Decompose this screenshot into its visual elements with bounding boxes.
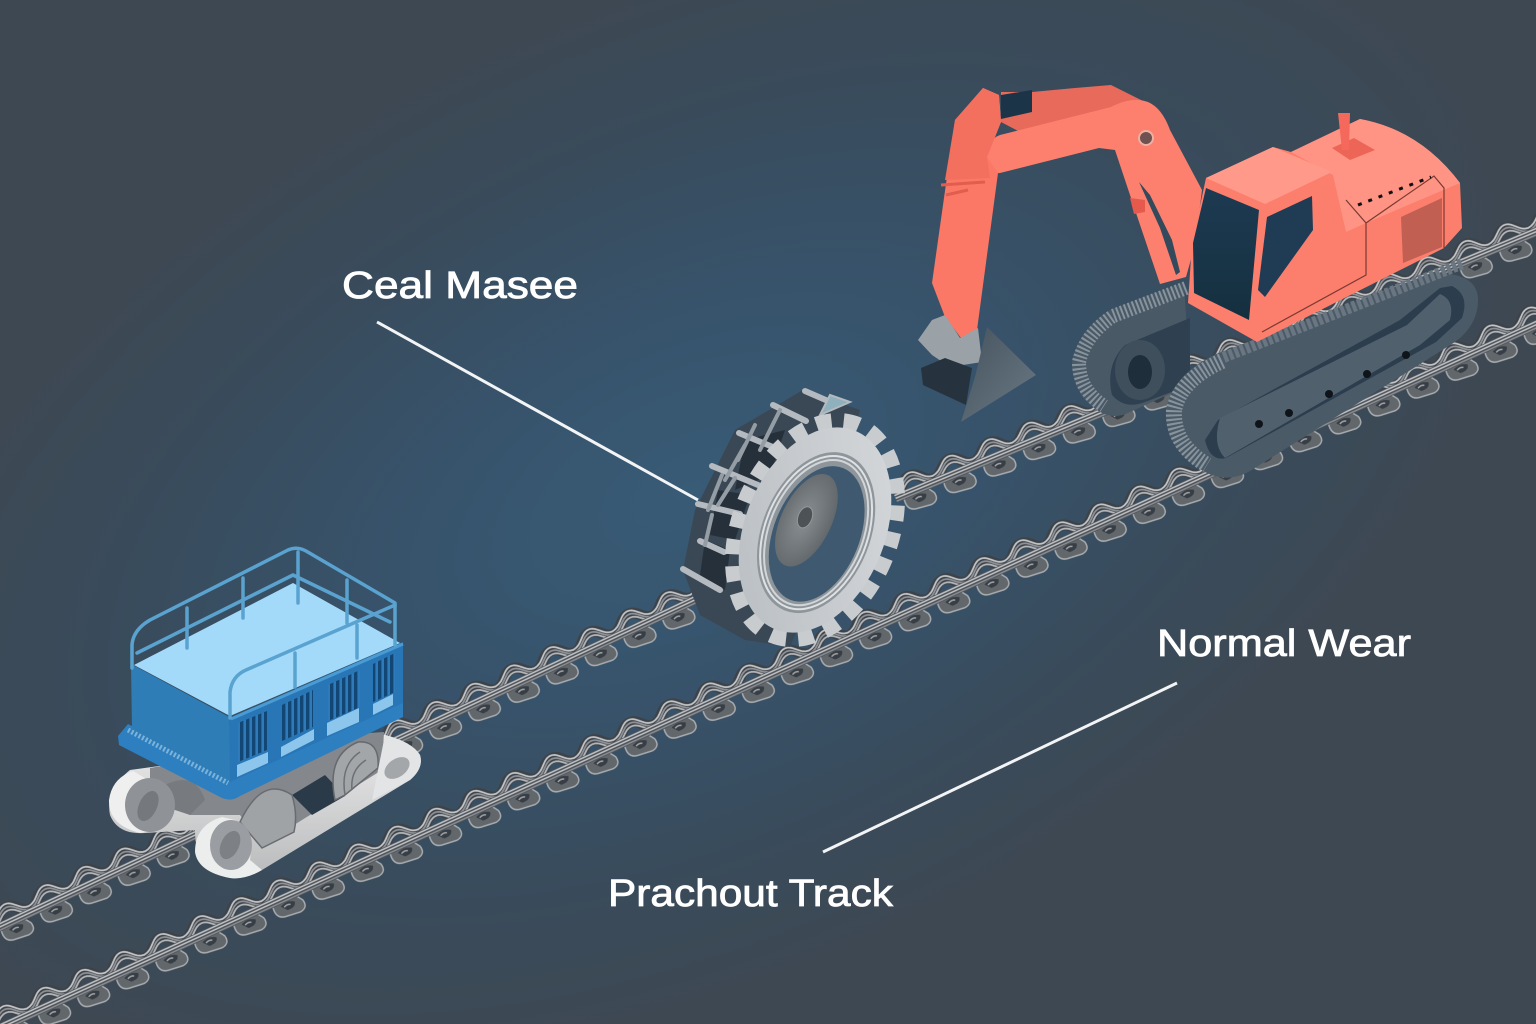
near crawler track (1166, 264, 1478, 478)
gap behind boom strut (1139, 182, 1180, 275)
stick arm clamp (941, 182, 985, 195)
vent panels (237, 653, 395, 777)
label: Prachout Track: Prachout Track (608, 873, 894, 915)
safety railing (132, 548, 395, 718)
chain track: lower (0, 297, 1536, 1024)
cart left face (131, 664, 231, 782)
bucket (961, 327, 1036, 422)
gear body (706, 400, 924, 660)
boom cylinder (1001, 85, 1145, 132)
access panel (1401, 198, 1442, 263)
gear rim rings (735, 434, 898, 631)
blue cart (109, 548, 421, 878)
engine cover top (1291, 119, 1460, 232)
front window (1193, 188, 1259, 320)
stick arm (932, 88, 1001, 338)
label: Normal Wear: Normal Wear (1157, 623, 1411, 665)
cart base rim (118, 700, 403, 800)
bucket linkage (918, 315, 982, 367)
orange excavator (918, 85, 1478, 478)
engine housing (1188, 119, 1462, 342)
rear crawler track (1072, 282, 1190, 416)
cart front face (229, 642, 403, 782)
boom cylinder cap (1001, 90, 1032, 119)
dashed vent line (1358, 177, 1431, 205)
leader line: Normal Wear to Prachout Track (823, 683, 1177, 852)
leader line: Ceal Masee (377, 322, 698, 500)
stick arm shade (945, 88, 1001, 180)
chain track: upper right section (887, 210, 1536, 517)
cab roof (1206, 147, 1332, 204)
hydraulic clamp (1130, 198, 1145, 214)
chain track: upper left section (0, 575, 716, 949)
gear hub (750, 452, 883, 616)
cart undercarriage (109, 732, 421, 878)
cart rim texture (128, 730, 228, 783)
cart top edge highlight (231, 644, 403, 719)
boom (985, 100, 1202, 284)
wheel tread backing (683, 390, 860, 647)
door seam lines (1262, 176, 1444, 332)
label: Ceal Masee: Ceal Masee (342, 265, 578, 307)
bucket back block (921, 358, 972, 405)
side window (1258, 196, 1313, 297)
exhaust stack (1332, 113, 1375, 160)
boom pivot (1139, 131, 1153, 145)
track side plate (1217, 294, 1451, 458)
track plate bolts (1255, 351, 1410, 428)
cart deck (134, 583, 400, 716)
sprocket wheel (683, 390, 924, 660)
